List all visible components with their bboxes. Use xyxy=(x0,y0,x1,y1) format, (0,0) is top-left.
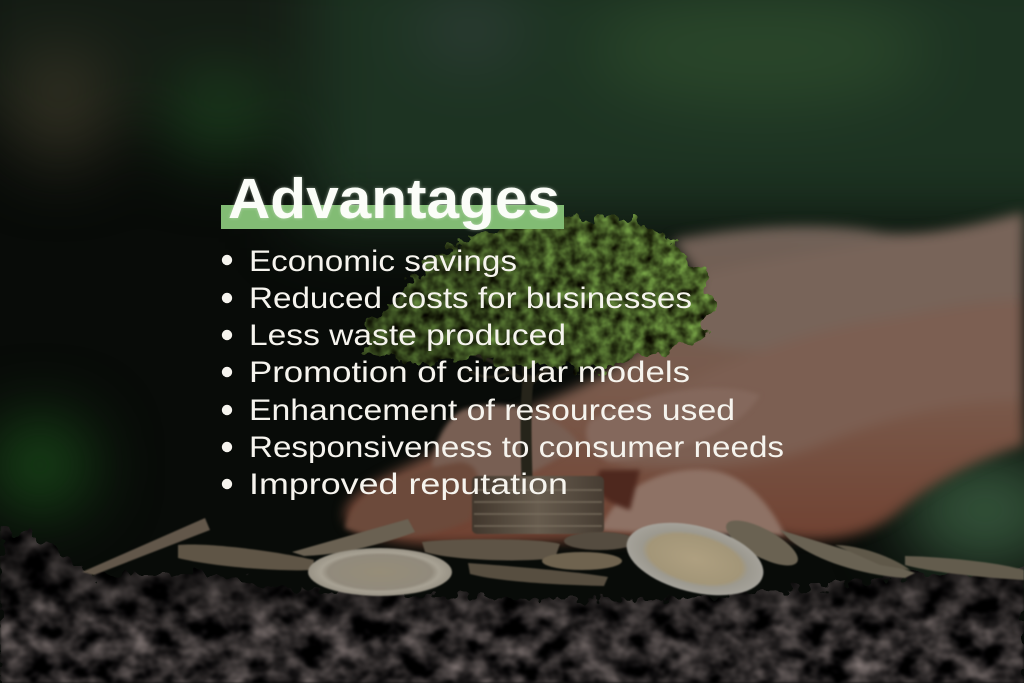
item: resources: Enhancement of resources used xyxy=(249,394,735,427)
title xyxy=(221,167,564,231)
trunk and branches xyxy=(450,325,625,480)
hand xyxy=(345,212,1024,545)
advantages list xyxy=(222,245,784,501)
item: consumer needs: Responsiveness to consumer needs xyxy=(249,431,784,464)
tree xyxy=(365,216,715,480)
title text: Advantages xyxy=(228,167,560,231)
item: economic savings: Economic savings xyxy=(249,245,517,278)
item: less waste: Less waste produced xyxy=(249,319,566,352)
coin stack xyxy=(472,476,604,534)
canopy xyxy=(365,216,715,369)
item: reduced costs: Reduced costs for businesses xyxy=(249,282,692,315)
title glow: Advantages xyxy=(228,167,560,231)
title highlight bar xyxy=(221,205,564,229)
item: circular models: Promotion of circular models xyxy=(249,356,690,389)
soil xyxy=(0,530,1024,683)
item: reputation: Improved reputation xyxy=(249,468,568,501)
scattered coins xyxy=(82,510,1024,608)
